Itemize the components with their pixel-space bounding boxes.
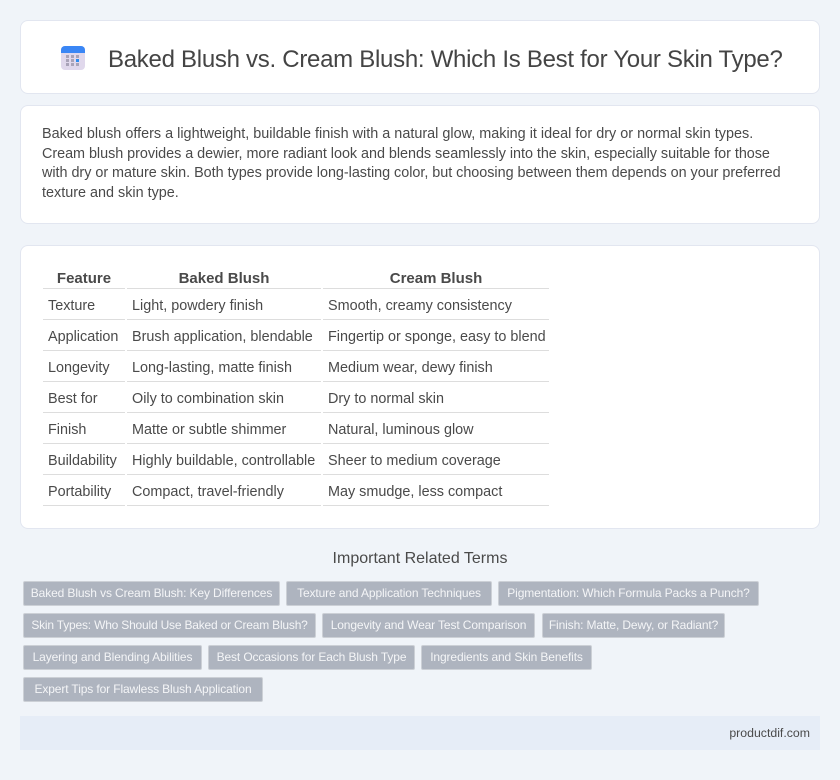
- summary text: texture and skin type.: [42, 185, 179, 201]
- comparison table: Sheer to medium coverage: [328, 452, 501, 468]
- tag: Baked Blush vs Cream Blush: Key Differences: [31, 586, 272, 600]
- tag: Skin Types: Who Should Use Baked or Cream Blush?: [31, 618, 308, 632]
- comparison table: Baked Blush: [179, 270, 269, 286]
- tag: Expert Tips for Flawless Blush Application: [34, 682, 252, 696]
- tag: [23, 581, 280, 606]
- panel: comparison table: [20, 245, 820, 529]
- footer source: productdif.com: [729, 726, 810, 740]
- comparison table: Compact, travel-friendly: [132, 484, 284, 500]
- comparison table: Best for: [48, 390, 98, 406]
- tag: Pigmentation: Which Formula Packs a Punch?: [507, 586, 750, 600]
- comparison table: Feature: [57, 270, 111, 286]
- tag: [421, 645, 592, 670]
- comparison table: Long-lasting, matte finish: [132, 360, 292, 376]
- comparison table: Portability: [48, 484, 111, 500]
- comparison table: Oily to combination skin: [132, 390, 284, 406]
- icon: calendar: [61, 46, 85, 70]
- comparison table: Application: [48, 328, 118, 344]
- comparison table: Brush application, blendable: [132, 328, 313, 344]
- tag: Longevity and Wear Test Comparison: [331, 618, 526, 632]
- comparison table: Longevity: [48, 360, 110, 376]
- heading: related terms: Important Related Terms: [333, 550, 507, 567]
- comparison table: Medium wear, dewy finish: [328, 360, 493, 376]
- summary text: Cream blush provides a dewier, more radiant look and blends seamlessly into the skin, especially suitable for those: [42, 146, 770, 162]
- tag: [208, 645, 415, 670]
- title: Baked Blush vs. Cream Blush: Which Is Best for Your Skin Type?: [108, 46, 783, 73]
- comparison table: Smooth, creamy consistency: [328, 298, 512, 314]
- tag: [23, 613, 316, 638]
- tag: Finish: Matte, Dewy, or Radiant?: [549, 618, 718, 632]
- tag: [23, 645, 202, 670]
- comparison table: Cream Blush: [390, 270, 482, 286]
- footer: [20, 716, 820, 750]
- tag: Ingredients and Skin Benefits: [430, 650, 583, 664]
- tag: Layering and Blending Abilities: [33, 650, 192, 664]
- comparison table: Light, powdery finish: [132, 298, 263, 314]
- comparison table: Dry to normal skin: [328, 390, 444, 406]
- comparison table: May smudge, less compact: [328, 484, 502, 500]
- panel: summary: [20, 105, 820, 224]
- summary text: with dry or mature skin. Both types provide long-lasting color, but choosing between them depends on your preferred: [42, 165, 781, 181]
- comparison table: Natural, luminous glow: [328, 422, 474, 438]
- comparison table: Texture: [48, 298, 95, 314]
- comparison table: Buildability: [48, 452, 117, 468]
- tag: [498, 581, 759, 606]
- tag: [23, 677, 263, 702]
- comparison table: [43, 270, 549, 506]
- tag: [286, 581, 492, 606]
- comparison table: Finish: [48, 422, 86, 438]
- summary text: [42, 126, 781, 201]
- comparison table: Fingertip or sponge, easy to blend: [328, 328, 546, 344]
- summary text: Baked blush offers a lightweight, buildable finish with a natural glow, making it ideal for dry or normal skin types.: [42, 126, 753, 142]
- tag: [322, 613, 535, 638]
- tag: Best Occasions for Each Blush Type: [217, 650, 406, 664]
- tag: [542, 613, 725, 638]
- tag: Texture and Application Techniques: [297, 586, 481, 600]
- panel: header: [20, 20, 820, 94]
- comparison table: Highly buildable, controllable: [132, 452, 315, 468]
- comparison table: Matte or subtle shimmer: [132, 422, 286, 438]
- panel: related term tags: [23, 581, 759, 702]
